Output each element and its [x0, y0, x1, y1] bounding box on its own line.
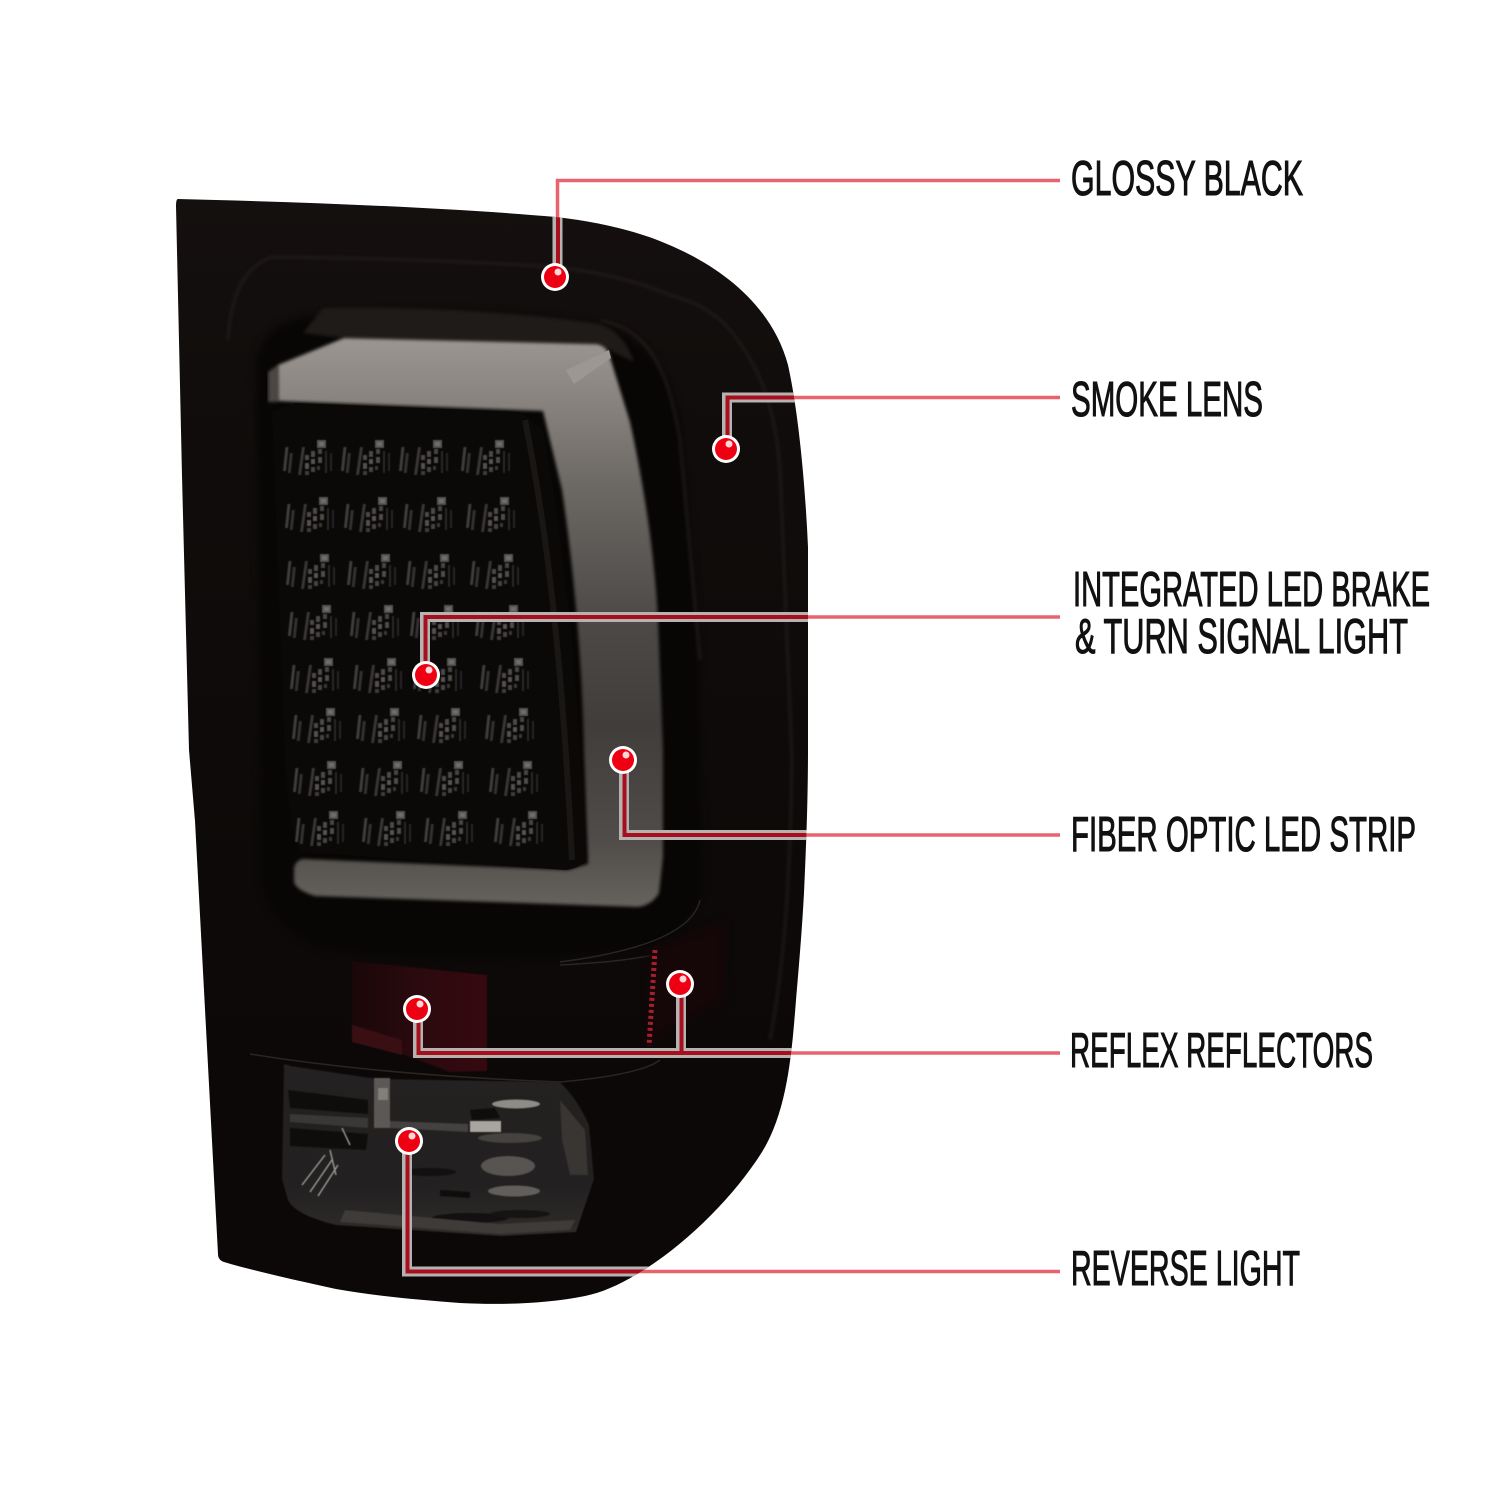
left end of light bar: [268, 365, 278, 402]
left reflex reflector: [352, 961, 487, 1072]
LED panel inner bezel: [525, 420, 572, 860]
right reflex reflector: [647, 921, 726, 1046]
outer rim contour: [228, 257, 792, 1040]
marker dot: right reflector: [666, 970, 694, 998]
callout: reflex reflectors: [403, 970, 1373, 1078]
label: REVERSE LIGHT: [1071, 1242, 1300, 1296]
callout: integrated LED brake and turn signal light: [412, 563, 1430, 689]
callout: fiber optic LED strip: [609, 746, 1416, 862]
tail light housing: [176, 199, 808, 1304]
inner dark recess: [256, 311, 702, 957]
label: GLOSSY BLACK: [1071, 152, 1303, 206]
callout: smoke lens: [712, 373, 1263, 463]
leader line: [727, 398, 1060, 445]
marker dot: [712, 435, 740, 463]
label: [1073, 563, 1430, 664]
marker dot: [541, 263, 569, 291]
marker dot: [412, 661, 440, 689]
lower recess contours: [250, 900, 700, 1082]
bar corner facet: [566, 350, 611, 384]
upper recess highlight wedge: [303, 308, 634, 362]
marker dot: [609, 746, 637, 774]
LED clusters: [283, 440, 543, 846]
tail light assembly: [176, 199, 808, 1304]
leader line: [407, 1148, 1060, 1272]
leader line: [624, 765, 1060, 835]
marker dot: [395, 1127, 423, 1155]
callout: glossy black: [541, 152, 1303, 291]
recess contour: [600, 320, 700, 660]
marker dot: left reflector: [403, 995, 431, 1023]
leader line: [558, 180, 1060, 270]
callout: reverse light: [395, 1127, 1300, 1296]
leader line: [418, 990, 1060, 1053]
reverse light lens: [282, 1064, 594, 1236]
fiber optic light bar: [278, 338, 663, 907]
leader line: [425, 617, 1060, 670]
LED panel: [272, 403, 586, 870]
label: SMOKE LENS: [1071, 373, 1263, 427]
